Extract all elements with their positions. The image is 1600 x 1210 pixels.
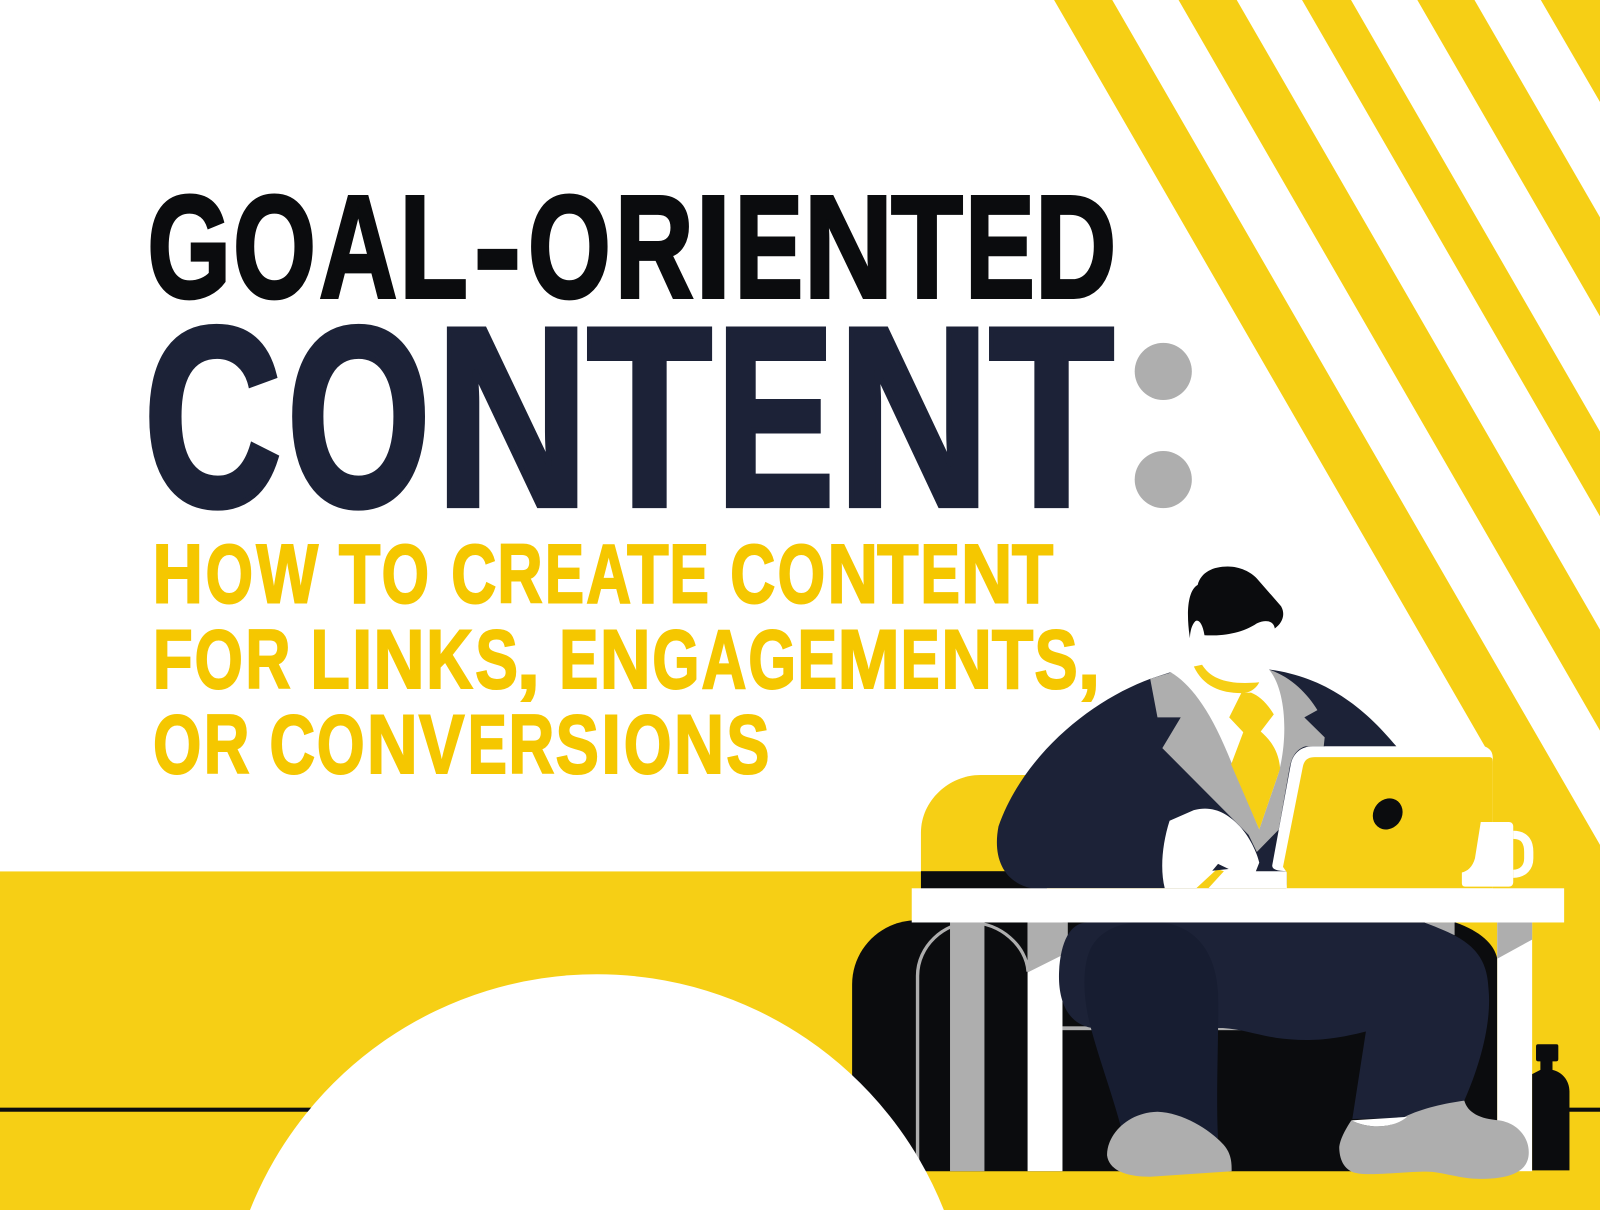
subtitle: E (798, 613, 837, 706)
bottle (1532, 1044, 1569, 1170)
illustration: desk and person (912, 566, 1569, 1179)
title: content: C (144, 275, 282, 560)
title: goal-oriented: O (233, 165, 316, 328)
subtitle: O (624, 698, 671, 791)
subtitle: A (586, 528, 631, 621)
title: goal-oriented: L (399, 165, 468, 328)
subtitle: I (601, 698, 621, 791)
hand details (1196, 864, 1229, 888)
subtitle: S (726, 698, 769, 791)
title: goal-oriented: I (695, 165, 731, 328)
subtitle: E (559, 613, 598, 706)
shoes (1107, 1101, 1529, 1179)
subtitle: G (652, 613, 699, 706)
laptop outline (1272, 746, 1493, 888)
subtitle: O (153, 698, 201, 791)
background: diagonal yellow stripes (1054, 0, 1600, 1210)
subtitle: M (838, 613, 900, 706)
subtitle: N (600, 613, 651, 706)
subtitle: , (517, 613, 540, 706)
subtitle: C (270, 698, 315, 791)
title: goal-oriented: A (319, 165, 397, 328)
laptop camera (1368, 795, 1407, 833)
title: goal-oriented: E (965, 165, 1035, 328)
subtitle: I (352, 613, 373, 706)
subtitle: F (153, 613, 193, 706)
title: content: N (837, 275, 990, 560)
subtitle: S (1035, 613, 1078, 706)
white semicircle (250, 974, 944, 1210)
subtitle: L (311, 613, 350, 706)
subtitle: R (509, 698, 554, 791)
subtitle: O (195, 613, 243, 706)
subtitle: H (152, 528, 203, 621)
hair (1188, 566, 1283, 638)
subtitle: S (556, 698, 599, 791)
subtitle: C (730, 528, 775, 621)
subtitle: A (702, 613, 746, 706)
title: goal-oriented: N (804, 165, 893, 328)
subtitle: E (670, 528, 709, 621)
subtitle: G (748, 613, 796, 706)
title: goal-oriented: O (528, 165, 611, 328)
title: goal-oriented: D (1035, 165, 1116, 328)
subtitle: C (451, 528, 496, 621)
tie (1229, 693, 1280, 829)
subtitle: N (961, 528, 1012, 621)
colon dots (1135, 343, 1192, 508)
subtitle: T (627, 528, 669, 621)
illustration: chair (852, 775, 1497, 1171)
subtitle: V (419, 698, 464, 791)
title: content: E (716, 275, 834, 560)
trousers: front leg (1084, 922, 1218, 1138)
subtitle (152, 528, 1100, 791)
title: goal-oriented: - (474, 165, 521, 328)
subtitle: E (901, 613, 940, 706)
subtitle: N (827, 528, 878, 621)
subtitle: T (877, 528, 919, 621)
subtitle: O (206, 528, 253, 621)
subtitle: O (778, 528, 825, 621)
jacket (997, 669, 1396, 888)
subtitle: K (426, 613, 473, 706)
subtitle: W (256, 528, 319, 621)
title: goal-oriented: R (615, 165, 694, 328)
title: content: O (287, 275, 431, 560)
subtitle: E (545, 528, 584, 621)
desk legs (950, 920, 1532, 1171)
title: goal-oriented: E (735, 165, 803, 328)
subtitle: S (475, 613, 518, 706)
subtitle: N (373, 613, 425, 706)
desk top (912, 888, 1564, 922)
subtitle: N (367, 698, 418, 791)
trousers: back leg (1059, 922, 1489, 1119)
subtitle: T (339, 528, 380, 621)
subtitle: N (941, 613, 992, 706)
subtitle: T (992, 613, 1033, 706)
title: goal-oriented: G (147, 165, 231, 328)
subtitle: E (921, 528, 960, 621)
subtitle: O (382, 528, 429, 621)
arm (1162, 809, 1287, 888)
laptop (1283, 757, 1493, 888)
floor line (0, 1108, 1600, 1112)
title: content: N (435, 275, 589, 560)
subtitle: R (497, 528, 543, 621)
mug (1462, 822, 1529, 887)
shirt (1171, 655, 1284, 829)
lapels (1150, 669, 1325, 852)
subtitle: , (1078, 613, 1100, 706)
subtitle: R (245, 613, 290, 706)
title: goal-oriented: T (891, 165, 963, 328)
subtitle: N (674, 698, 724, 791)
background: yellow floor band (0, 871, 1600, 1210)
subtitle: O (317, 698, 365, 791)
collar (1194, 665, 1259, 693)
subtitle: R (204, 698, 249, 791)
subtitle: E (468, 698, 507, 791)
subtitle: T (1012, 528, 1053, 621)
title: content: T (989, 275, 1114, 560)
title: content: T (587, 275, 712, 560)
